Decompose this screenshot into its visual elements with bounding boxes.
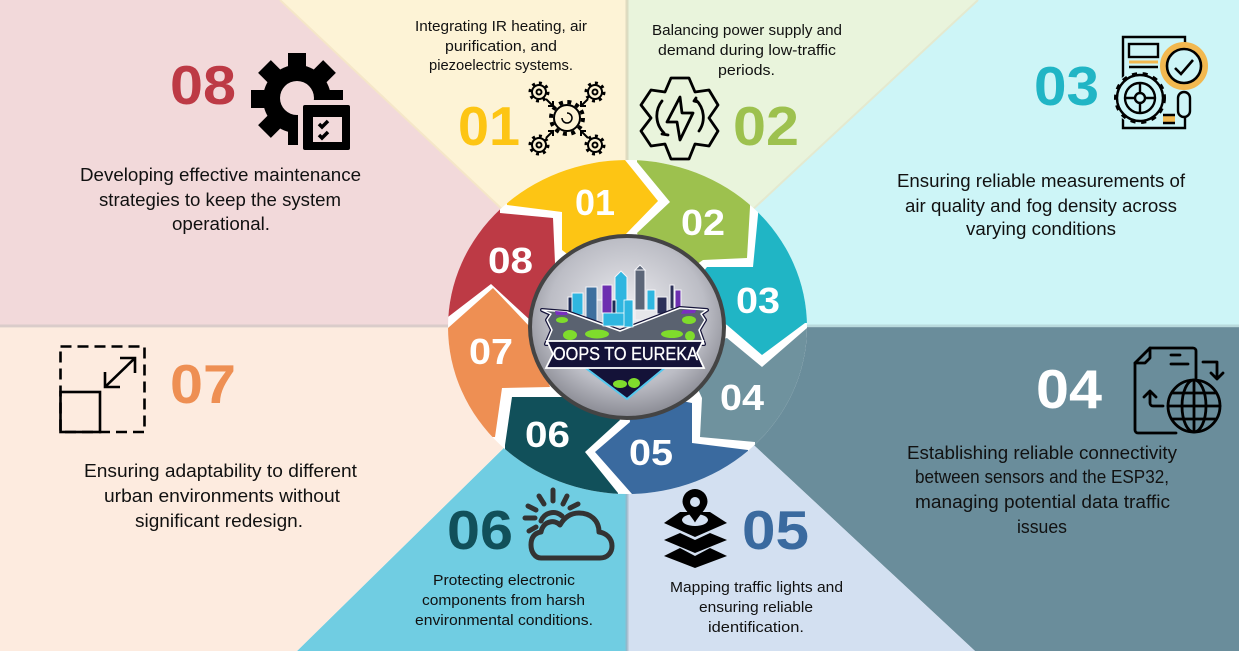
text 03: Ensuring reliable measurements of bbox=[897, 171, 1186, 191]
number 06: 06 bbox=[447, 499, 513, 561]
panel 07: adaptability bbox=[60, 346, 357, 531]
text 08: Developing effective maintenance bbox=[80, 165, 361, 185]
text 01: piezoelectric systems. bbox=[429, 57, 573, 74]
segment 06 bbox=[505, 397, 620, 494]
segment 01 bbox=[506, 160, 658, 254]
text 05: Mapping traffic lights and bbox=[670, 579, 843, 596]
text 01: Integrating IR heating, air bbox=[415, 18, 587, 35]
logo: Oops to Eureka bbox=[530, 236, 724, 418]
wheel numbers: 03 bbox=[736, 280, 780, 321]
text 05 bbox=[670, 579, 843, 636]
wheel numbers: 04 bbox=[720, 377, 764, 418]
text 08 bbox=[80, 165, 361, 234]
text 08: strategies to keep the system bbox=[99, 190, 341, 210]
segment 08 bbox=[448, 210, 555, 318]
icon: sun and cloud bbox=[525, 490, 612, 558]
logo banner bbox=[546, 341, 704, 368]
number 03: 03 bbox=[1034, 55, 1099, 117]
text 05: identification. bbox=[708, 619, 804, 636]
text 01: purification, and bbox=[445, 38, 557, 55]
logo shield point bbox=[583, 366, 667, 399]
text 03: varying conditions bbox=[966, 219, 1116, 239]
text 07: Ensuring adaptability to different bbox=[84, 461, 357, 481]
text 02: Balancing power supply and bbox=[652, 22, 842, 39]
wheel numbers: 01 bbox=[575, 182, 615, 223]
text 02 bbox=[652, 22, 842, 79]
wheel numbers: 02 bbox=[681, 202, 725, 243]
wheel numbers: 06 bbox=[525, 414, 570, 455]
logo road platform bbox=[542, 308, 707, 344]
panel 05: mapping traffic lights bbox=[664, 489, 843, 636]
text 04: Establishing reliable connectivity bbox=[907, 443, 1177, 463]
text 06: environmental conditions. bbox=[415, 612, 593, 629]
number 07: 07 bbox=[170, 353, 236, 415]
icon: power gear bbox=[641, 78, 718, 159]
text 02: demand during low-traffic bbox=[658, 42, 837, 59]
icon: inspection document bbox=[1113, 37, 1204, 128]
text 04 bbox=[907, 443, 1177, 537]
panel 01: integrating systems bbox=[415, 18, 604, 157]
segment 03 bbox=[704, 212, 807, 355]
panel 08: maintenance bbox=[80, 53, 361, 234]
icon: map pin on layers bbox=[664, 489, 727, 568]
wheel numbers: 08 bbox=[488, 240, 533, 281]
chart: segmented arrow wheel bbox=[448, 160, 807, 494]
text 03: air quality and fog density across bbox=[905, 196, 1177, 216]
segment 05 bbox=[595, 402, 748, 494]
logo wordmark: OOPS TO EUREKA bbox=[553, 344, 698, 364]
wheel numbers bbox=[469, 182, 780, 473]
number 05: 05 bbox=[742, 499, 809, 561]
text 01 bbox=[415, 18, 587, 74]
panel 04: connectivity bbox=[907, 348, 1223, 537]
text 07: urban environments without bbox=[104, 486, 340, 506]
number 02: 02 bbox=[733, 95, 799, 157]
logo skyline bbox=[568, 265, 681, 322]
text 07 bbox=[84, 461, 357, 531]
number 01: 01 bbox=[458, 95, 520, 157]
panel 06: protecting electronics bbox=[415, 490, 612, 629]
panel 02: balancing power bbox=[641, 22, 842, 159]
icon: document and globe bbox=[1135, 348, 1223, 433]
wheel numbers: 05 bbox=[629, 432, 673, 473]
number 08: 08 bbox=[170, 54, 236, 116]
text 08: operational. bbox=[172, 214, 270, 234]
number 04: 04 bbox=[1036, 358, 1102, 420]
text 02: periods. bbox=[718, 62, 775, 79]
segment 07 bbox=[448, 288, 550, 437]
text 05: ensuring reliable bbox=[699, 599, 813, 616]
icon: resize frame bbox=[60, 346, 144, 432]
text 03 bbox=[897, 171, 1186, 239]
text 06: components from harsh bbox=[422, 592, 585, 609]
wheel numbers: 07 bbox=[469, 331, 513, 372]
panel 03: reliable measurements bbox=[897, 37, 1204, 239]
segment 04 bbox=[698, 328, 807, 444]
text 04: issues bbox=[1017, 517, 1067, 537]
text 06: Protecting electronic bbox=[433, 572, 576, 589]
segment 02 bbox=[637, 160, 750, 263]
text 06 bbox=[415, 572, 593, 629]
icon: gear with checklist bbox=[251, 53, 353, 153]
text 07: significant redesign. bbox=[135, 511, 303, 531]
icon: connected gears bbox=[530, 83, 604, 154]
text 04: between sensors and the ESP32, bbox=[915, 467, 1169, 487]
text 04: managing potential data traffic bbox=[915, 492, 1170, 512]
